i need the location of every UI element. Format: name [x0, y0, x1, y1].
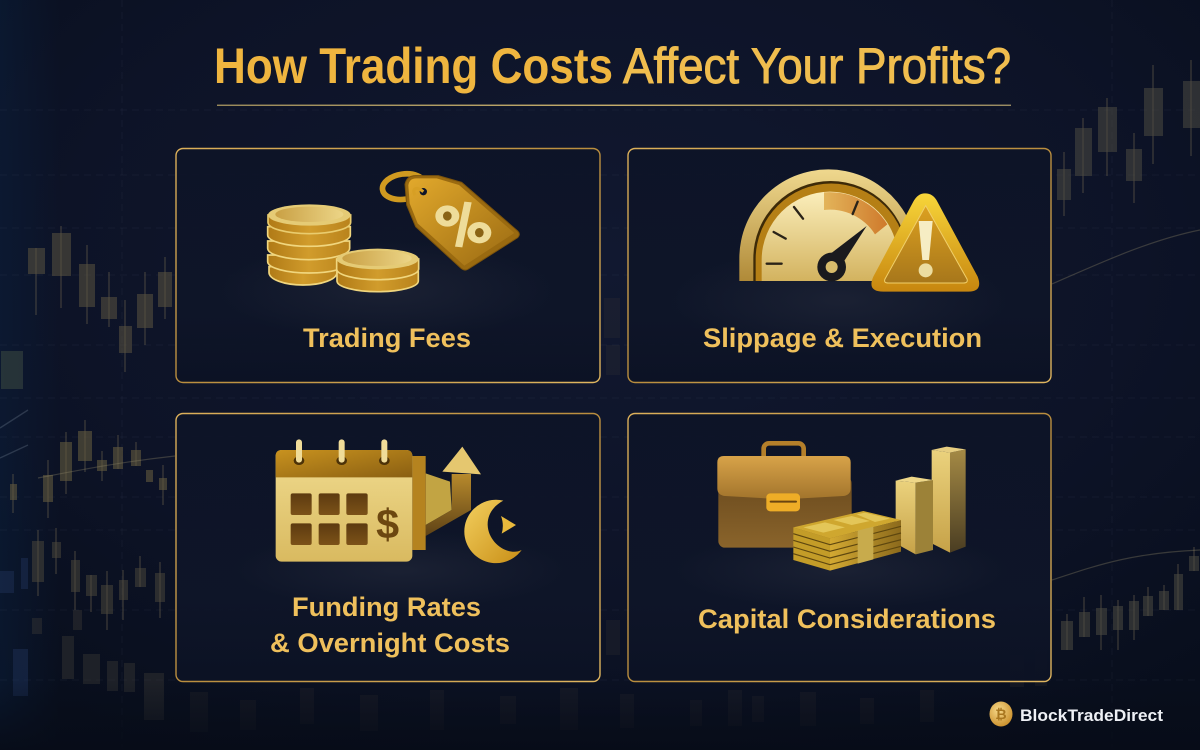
panel: funding rates and overnight costs	[176, 414, 600, 682]
label: funding rates and overnight costs	[270, 592, 510, 658]
title: How Trading Costs	[214, 38, 613, 94]
label: capital considerations: Capital Considerations	[698, 604, 996, 634]
label: slippage and execution: Slippage & Execution	[703, 323, 982, 353]
title	[214, 38, 1011, 94]
icon: briefcase, banknote stack and bars	[717, 443, 966, 571]
brand name: BlockTradeDirect	[1020, 706, 1163, 725]
icon: speed gauge with warning triangle	[739, 169, 979, 292]
title divider rule	[217, 105, 1011, 106]
panel: capital considerations	[628, 414, 1051, 682]
icon: calendar with dollar sign, arrow and moon	[276, 439, 522, 563]
label: funding rates and overnight costs: Funding Rates	[292, 592, 481, 622]
panel: slippage and execution	[628, 148, 1051, 382]
icon: calendar with dollar sign, arrow and moon: $	[376, 501, 399, 547]
logo: BlockTradeDirect	[990, 702, 1163, 726]
panel: trading fees	[176, 148, 600, 382]
icon: coin stacks and percent price tag	[268, 171, 519, 292]
icon: bitcoin coin	[990, 702, 1012, 726]
title: Affect Your Profits?	[623, 38, 1011, 94]
label: funding rates and overnight costs: & Overnight Costs	[270, 628, 510, 658]
icon: bitcoin coin: ₿	[995, 706, 1007, 722]
label: trading fees: Trading Fees	[303, 323, 471, 353]
